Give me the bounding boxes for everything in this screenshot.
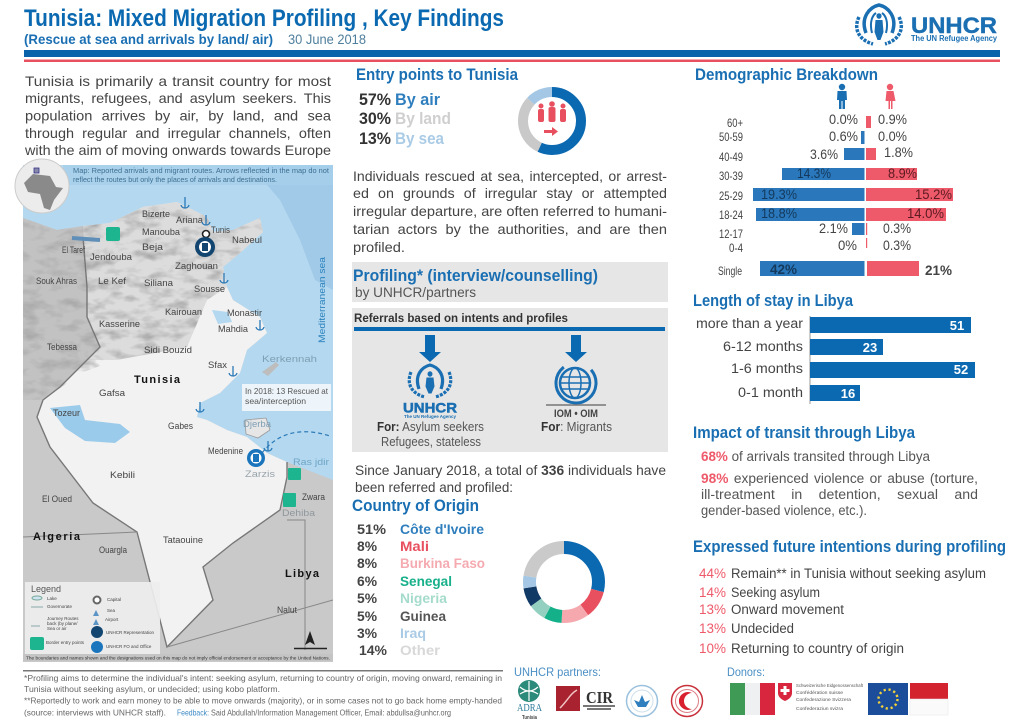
panel: map of Tunisia: The boundaries and names shown and the designations used on this map do not imply official endorsement or acceptance by the United Nations. <box>26 656 330 660</box>
chart: length of stay: 1-6 months <box>731 361 803 376</box>
intro text block: migrants, refugees, and asylum seekers. This <box>25 90 331 106</box>
age labels: Single <box>718 264 742 278</box>
list: future intentions: 14% <box>699 585 726 600</box>
partners heading: UNHCR partners: <box>514 665 601 679</box>
map labels: Gabes <box>168 421 193 431</box>
list: country of origin: 6% <box>357 573 378 589</box>
logo: UNHCR referral <box>403 365 457 419</box>
heading: entry points: Entry points to Tunisia <box>356 65 518 84</box>
map labels: Kebili <box>110 470 135 480</box>
logo: red crescent <box>672 686 702 716</box>
list: future intentions: Seeking asylum <box>731 585 820 600</box>
chart: length of stay: 6-12 months <box>723 339 803 354</box>
logo: CIR <box>556 686 615 711</box>
list: future intentions: 13% <box>699 602 726 617</box>
text: total profiled <box>355 462 666 495</box>
list: country of origin: 51% <box>357 521 387 537</box>
text: individuals rescued: ed on grounds of irregular stay or attempted <box>353 185 667 201</box>
map icons <box>106 227 120 241</box>
value labels: 0.0% <box>878 128 907 144</box>
list: future intentions: 44% <box>699 566 726 581</box>
text: impact of transit: 68% of arrivals transited through Libya <box>701 449 930 464</box>
text: total profiled: Since January 2018, a total of 336 individuals have <box>355 462 666 478</box>
map labels: Djerba <box>243 419 271 429</box>
panel: profiling: by UNHCR/partners <box>355 285 476 300</box>
text: for asylum seekers <box>377 419 484 449</box>
map labels: Bizerte <box>142 209 170 219</box>
footnotes: *Profiling aims to determine the individual's intent: seeking asylum, returning to country of origin, moving onward, remaining in <box>24 673 502 683</box>
map labels: El Taref <box>62 245 85 255</box>
map labels: Sfax <box>208 360 228 370</box>
logo: Switzerland: Confederazione Svizzera <box>796 697 852 702</box>
Tunisia south <box>37 202 287 647</box>
age labels: 60+ <box>727 116 743 130</box>
map labels: Tunisia <box>134 374 181 386</box>
map legend: UNHCR Representation <box>106 630 155 635</box>
map labels: Beja <box>142 242 163 252</box>
chart: age and sex pyramid: 42% <box>770 261 798 277</box>
logo: CIR: CIR <box>586 688 614 707</box>
list: country of origin: Mali <box>400 538 429 554</box>
list: future intentions: Onward movement <box>731 602 844 617</box>
age labels: 25-29 <box>719 189 743 203</box>
list: country of origin: Other <box>400 642 441 658</box>
text: individuals rescued <box>353 168 667 255</box>
logo: Switzerland: Confederaziun svizra <box>796 706 844 711</box>
list: future intentions: 13% <box>699 621 726 636</box>
list: country of origin: 5% <box>357 608 378 624</box>
logo: Switzerland: Confédération suisse <box>796 690 844 695</box>
map labels: Zaghouan <box>175 261 218 271</box>
map labels: Medenine <box>208 446 243 456</box>
chart: age and sex pyramid: 14.0% <box>907 205 944 221</box>
intro text block: through regular and irregular channels, often <box>25 125 331 141</box>
map callout: rescued at sea <box>242 384 331 411</box>
list: country of origin: 3% <box>357 625 378 641</box>
donut: entry points <box>523 92 581 150</box>
route <box>262 432 330 453</box>
text: impact of transit: 98% experienced violence or abuse (torture, <box>701 471 978 486</box>
list: future intentions: Undecided <box>731 621 794 636</box>
list: country of origin: Guinea <box>400 608 446 624</box>
entry points list: 13% <box>359 130 391 148</box>
heading: demographic breakdown: Demographic Breakdown <box>695 65 878 84</box>
icon: female <box>886 84 896 109</box>
female bars <box>866 116 953 276</box>
flag: Italy <box>730 683 775 715</box>
map disclaimer <box>23 654 333 661</box>
male bars <box>753 131 864 276</box>
map legend: Governorate <box>47 604 73 609</box>
chart: age and sex pyramid: 18.8% <box>761 205 797 221</box>
map labels: Tataouine <box>163 535 203 545</box>
panel: profiling: Profiling* (interview/counselling) <box>353 266 598 285</box>
list: country of origin: Senegal <box>400 573 452 589</box>
logo: UNHCR: The UN Refugee Agency <box>911 34 998 43</box>
map labels: Kasserine <box>99 319 140 329</box>
age labels: 40-49 <box>719 150 743 164</box>
logos: donors <box>730 683 948 715</box>
neighbouring land <box>23 218 332 480</box>
logo: UNHCR referral: The UN Refugee Agency <box>404 414 456 419</box>
panel: map of Tunisia: reflect the routes but only the places of arrivals and destinations. <box>73 175 277 184</box>
chart: length of stay: 0-1 month <box>738 385 803 400</box>
panel: referrals <box>352 308 668 452</box>
logo: ADRA: ADRA <box>517 703 543 714</box>
entry points list: By land <box>395 110 451 128</box>
map note <box>63 165 333 185</box>
entry points list <box>359 91 451 148</box>
chart: age and sex pyramid <box>718 111 953 278</box>
value labels: 0.0% <box>829 111 858 127</box>
list: future intentions: Remain** in Tunisia without seeking asylum <box>731 566 986 581</box>
arrow: to IOM <box>565 335 587 362</box>
icon: people and arrow <box>538 101 566 136</box>
logos: partners <box>517 680 702 721</box>
chart: length of stay: 16 <box>841 386 855 401</box>
panel: map of Tunisia: In 2018: 13 Rescued at <box>245 386 329 396</box>
Kerkennah island <box>262 362 279 376</box>
map legend: Sea or air <box>47 626 67 631</box>
logo: IOM <box>546 355 606 420</box>
list: country of origin: Iraq <box>400 625 426 641</box>
flag: Indonesia <box>910 683 948 715</box>
logo: UNHCR referral: UNHCR <box>403 400 457 416</box>
map legend: back (by plane/ <box>47 621 78 626</box>
chart: age and sex pyramid: 15.2% <box>915 186 952 202</box>
footnotes: **Reportedly to work and earn money to be able to move onwards (majority), or in some cases not to go back home empty-handed <box>24 696 502 706</box>
list: country of origin: 5% <box>357 590 378 606</box>
age labels: 50-59 <box>719 130 743 144</box>
value labels <box>810 111 953 278</box>
map labels: Mahdia <box>218 324 248 334</box>
logo: ADRA: Tunisia <box>522 715 537 721</box>
chart: age and sex pyramid: 8.9% <box>888 165 917 181</box>
entry points list: 57% <box>359 91 391 109</box>
map labels: Tozeur <box>53 408 80 418</box>
panel: profiling <box>352 262 668 302</box>
map labels: Zarzis <box>245 469 276 479</box>
panel: referrals: Referrals based on intents and profiles <box>354 313 568 325</box>
chart: length of stay: 52 <box>954 362 968 377</box>
arrow: to UNHCR <box>419 335 441 362</box>
map labels: El Oued <box>42 494 72 504</box>
intro text block: population arrives by air, by land, and sea <box>25 108 331 124</box>
heading: length of stay: Length of stay in Libya <box>693 291 853 310</box>
entry points list: By sea <box>395 130 445 148</box>
map labels: Ariana <box>176 215 203 225</box>
report date: 30 June 2018 <box>288 31 366 47</box>
text: impact of transit: gender-based violence, etc.). <box>701 503 867 518</box>
logo: UNHCR: UNHCR <box>911 13 997 38</box>
list: country of origin: 14% <box>359 642 388 658</box>
list: future intentions <box>699 566 986 656</box>
footnotes: Said Abdullah/Information Management Officer, Email: abdullsa@unhcr.org <box>211 708 451 718</box>
title: Tunisia: Mixed Migration Profiling , Key Findings <box>24 5 504 32</box>
globe <box>15 159 69 213</box>
text: for migrants: For: Migrants <box>541 419 612 434</box>
north arrow <box>294 631 327 648</box>
map legend: Capital <box>107 597 121 602</box>
intro text block <box>24 73 331 158</box>
entry points list: 30% <box>359 110 391 128</box>
panel: map of Tunisia: Map: Reported arrivals and migrant routes. Arrows reflected in the map do not <box>73 166 330 175</box>
value labels: 0.9% <box>878 111 907 127</box>
map labels: Monastir <box>227 308 262 318</box>
logo: Switzerland: Schweizerische Eidgenossenschaft <box>796 683 864 688</box>
map legend: Journey Routes <box>47 616 79 621</box>
map labels: Ouargla <box>99 545 127 555</box>
text: individuals rescued: Individuals rescued at sea, intercepted, or arrest- <box>353 168 667 184</box>
map labels: Gafsa <box>99 388 125 398</box>
map labels: Tunis <box>211 225 230 235</box>
footnotes: Feedback: <box>177 708 209 718</box>
footer rule <box>23 670 503 672</box>
map labels: Algeria <box>33 531 81 543</box>
value labels: 0% <box>838 237 857 253</box>
entry points list: By air <box>395 91 441 109</box>
donut: country of origin <box>530 548 598 616</box>
chart: length of stay <box>696 316 975 404</box>
map legend: Sea <box>107 608 116 613</box>
map labels: Kairouan <box>165 307 202 317</box>
map labels: Mediterranean sea <box>317 257 327 343</box>
text: individuals rescued: irregular departure, are often referred to humani- <box>353 203 667 219</box>
map legend <box>25 582 160 654</box>
map labels: Libya <box>285 568 320 580</box>
text: impact of transit: ill-treatment in detention, sexual and <box>701 487 978 502</box>
map legend: UNHCR FO and Office <box>106 644 152 649</box>
map labels: Nabeul <box>232 235 262 245</box>
Tunisia north hills <box>83 202 263 360</box>
subtitle: (Rescue at sea and arrivals by land/ air) <box>24 31 273 47</box>
map legend: Airport <box>105 617 119 622</box>
map labels <box>33 209 329 615</box>
list: future intentions: Returning to country of origin <box>731 641 904 656</box>
chart: age and sex pyramid: 19.3% <box>761 186 797 202</box>
value labels: 2.1% <box>819 220 848 236</box>
logo: Switzerland <box>778 683 864 711</box>
footnotes <box>24 673 502 718</box>
age labels: 12-17 <box>719 227 743 241</box>
map legend: Lake <box>47 596 57 601</box>
heading: impact of transit: Impact of transit through Libya <box>693 423 915 442</box>
age labels: 30-39 <box>719 169 743 183</box>
footnotes: Tunisia without seeking asylum, or undecided; using kobo platform. <box>24 684 280 694</box>
text: total profiled: been referred and profiled: <box>355 479 513 495</box>
map legend: Border entry points <box>46 640 85 645</box>
map labels: Nalut <box>277 605 297 615</box>
value labels: 21% <box>925 262 953 278</box>
list: country of origin: Burkina Faso <box>400 555 485 571</box>
map labels: Sousse <box>194 284 225 294</box>
age labels <box>718 116 743 278</box>
map labels: Dehiba <box>282 508 315 518</box>
logo: UNHCR <box>857 5 998 44</box>
age labels: 18-24 <box>719 208 743 222</box>
chart: length of stay: 23 <box>863 340 877 355</box>
text: individuals rescued: tarian actors by the authorities, and are then <box>353 221 667 237</box>
icon: male <box>837 84 847 109</box>
logo: IOM: IOM • OIM <box>554 408 598 420</box>
intro text block: Tunisia is primarily a transit country for most <box>25 73 331 89</box>
borders <box>37 237 287 647</box>
donors heading: Donors: <box>727 665 765 679</box>
value labels: 3.6% <box>810 146 838 162</box>
map labels: Sidi Bouzid <box>144 345 192 355</box>
list: country of origin: 8% <box>357 555 378 571</box>
value labels: 0.3% <box>883 220 911 236</box>
list: country of origin: Côte d'Ivoire <box>400 521 484 537</box>
flag: EU <box>868 683 908 715</box>
heading: country of origin: Country of Origin <box>352 496 479 515</box>
map labels: Manouba <box>142 227 180 237</box>
lakes <box>50 405 130 443</box>
list: country of origin: 8% <box>357 538 378 554</box>
map labels: Zwara <box>302 492 325 502</box>
logo: partner round emblem <box>626 686 658 716</box>
map labels: Kerkennah <box>262 354 317 364</box>
panel: map of Tunisia: sea/interception <box>245 396 306 406</box>
intro text block: with the aim of moving onwards towards Europe <box>24 142 331 158</box>
map labels: Le Kef <box>98 276 127 286</box>
list: country of origin: Nigeria <box>400 590 447 606</box>
map labels: Souk Ahras <box>36 276 77 286</box>
map labels: Tebessa <box>47 342 77 352</box>
chart: length of stay: 51 <box>950 318 964 333</box>
Djerba island <box>245 418 270 438</box>
age labels: 0-4 <box>729 241 743 255</box>
map labels: Ras jdir <box>293 457 329 467</box>
map labels: Jendouba <box>90 252 132 262</box>
map legend: Legend <box>31 584 61 594</box>
chart: length of stay: more than a year <box>696 316 804 331</box>
chart: age and sex pyramid: 14.3% <box>797 165 831 181</box>
text: individuals rescued: profiled. <box>353 239 405 255</box>
logo: ADRA <box>517 680 543 721</box>
header rule <box>24 50 1000 62</box>
value labels: 1.8% <box>884 144 913 160</box>
text: for asylum seekers: For: Asylum seekers <box>377 419 484 434</box>
text: impact of transit <box>701 449 978 518</box>
panel: map of Tunisia <box>15 159 333 662</box>
value labels: 0.6% <box>829 128 858 144</box>
list: country of origin <box>357 521 485 658</box>
value labels: 0.3% <box>883 237 911 253</box>
footnotes: (source: interviews with UNHCR staff). <box>24 708 166 718</box>
map labels: Siliana <box>144 278 173 288</box>
list: future intentions: 10% <box>699 641 726 656</box>
text: for asylum seekers: Refugees, stateless <box>381 434 481 449</box>
